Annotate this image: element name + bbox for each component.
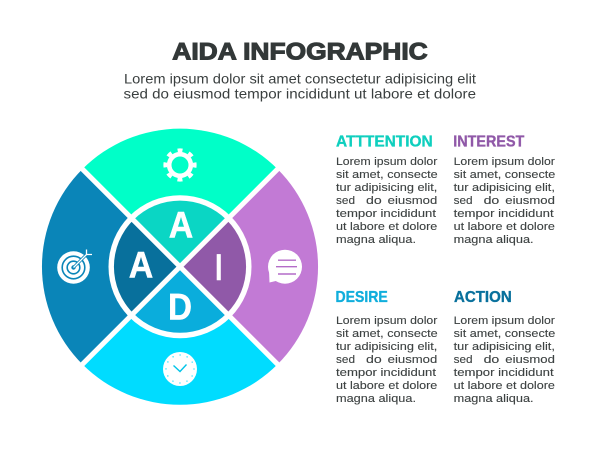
text block: interest: sed [454,195,473,207]
subtitle text: sed do eiusmod tempor incididunt ut labore et dolore [124,86,476,101]
text block: action: sed [454,354,473,366]
icon: target [57,250,92,284]
text block: action: ACTION [454,289,512,306]
text block: attention [336,134,438,246]
text block: desire: sit amet, consecte [336,328,438,340]
subtitle text: Lorem ipsum dolor sit amet consectetur adipisicing elit [124,71,476,86]
outer segment: action [42,169,180,364]
letter A top: A [169,204,193,245]
text block: action: tempor incididunt [454,367,555,379]
text block: action: do [484,354,499,366]
AIDA circular diagram [42,129,318,405]
text block: interest: magna aliqua. [454,234,534,246]
text block: action: tur adipisicing elit, [454,341,555,353]
letter I: I [215,247,222,288]
text block: attention: ATTTENTION [336,134,433,151]
text block: interest: INTEREST [453,134,524,151]
text block: desire: Lorem ipsum dolor [336,315,438,327]
text block: action: sit amet, consecte [454,328,555,340]
text block: interest: tur adipisicing elit, [454,182,555,194]
letter A left: A [129,244,153,285]
outer segment: interest [180,169,318,364]
outer segment: desire [82,267,278,405]
subtitle text [124,71,476,101]
text block: interest [453,134,555,246]
text block: attention: sit amet, consecte [336,169,438,181]
text block: attention: sed [336,195,355,207]
text block: interest: do [484,195,499,207]
text block: interest: Lorem ipsum dolor [454,156,555,168]
text block: interest: eiusmod [505,195,555,207]
text block: desire [336,289,438,405]
text block: desire: eiusmod [388,354,437,366]
text block: interest: sit amet, consecte [454,169,555,181]
text block: attention: tur adipisicing elit, [336,182,437,194]
text block: desire: ut labore et dolore [336,380,437,392]
text block: desire: DESIRE [336,289,388,306]
icon: speech bubble [268,250,302,284]
text block: attention: Lorem ipsum dolor [336,156,438,168]
text block: desire: magna aliqua. [336,393,416,405]
text block: desire: tur adipisicing elit, [336,341,437,353]
text block: action: magna aliqua. [454,393,534,405]
text block: interest: tempor incididunt [454,208,555,220]
inner segment: interest [180,220,246,313]
icon: gear [165,150,195,180]
inner segment: action [114,220,180,313]
text block: attention: do [366,195,382,207]
text block: attention: tempor incididunt [336,208,437,220]
title: AIDA INFOGRAPHIC [172,38,428,65]
text block: attention: magna aliqua. [336,234,416,246]
text block: action: Lorem ipsum dolor [454,315,555,327]
text block: action [454,289,555,405]
text block: desire: tempor incididunt [336,367,437,379]
icon: clock [163,352,197,386]
text block: attention: eiusmod [388,195,437,207]
text block: action: ut labore et dolore [454,380,555,392]
inner segment: desire [133,267,227,333]
text block: attention: ut labore et dolore [336,221,437,233]
letter D: D [168,286,192,327]
text block: desire: do [366,354,382,366]
text block: desire: sed [336,354,355,366]
outer segment: attention [82,129,278,267]
text block: action: eiusmod [505,354,555,366]
text block: interest: ut labore et dolore [454,221,555,233]
inner segment: attention [133,201,227,267]
